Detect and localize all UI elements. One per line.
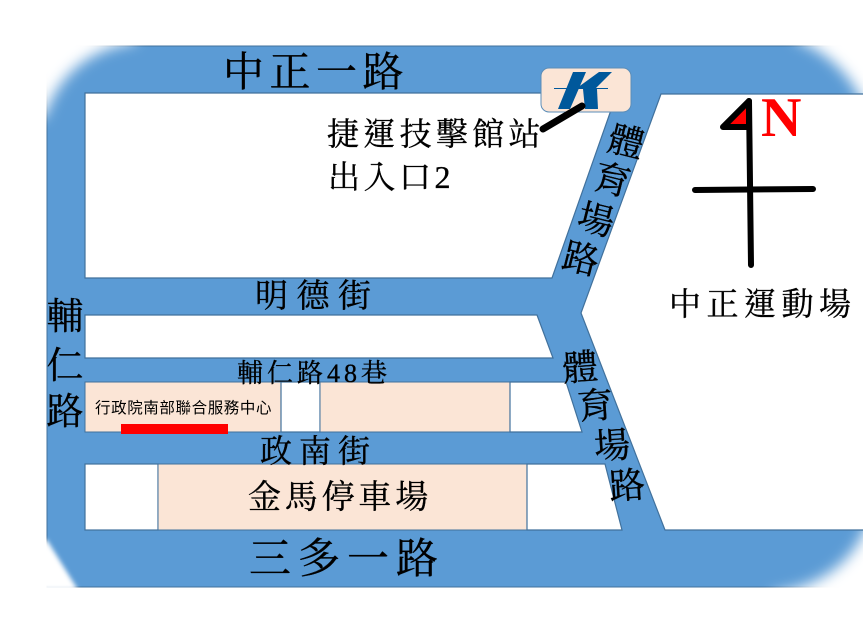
station label: 捷運技擊館站 xyxy=(327,116,545,152)
road label: 體育場路 north: 體 xyxy=(604,119,648,166)
block: north of Lane 48 xyxy=(85,315,553,358)
block: white lot west of parking xyxy=(85,464,158,530)
label: 中正運動場: 中正運動場 xyxy=(669,286,857,322)
road label: 輔仁路 vertical xyxy=(46,296,84,433)
road label: 體育場路 south: 育 xyxy=(576,385,615,427)
road label: 輔仁路48巷: 輔仁路48巷 xyxy=(237,359,391,388)
station pointer line xyxy=(543,106,582,129)
block: white lot east of parking xyxy=(527,464,622,530)
road label: 輔仁路 vertical: 仁 xyxy=(46,346,84,387)
label: 金馬停車場: 金馬停車場 xyxy=(248,479,432,516)
road label: 體育場路 south: 路 xyxy=(608,465,647,507)
road label: 輔仁路 vertical: 路 xyxy=(46,392,84,433)
block: peach building xyxy=(320,382,510,432)
road label: 輔仁路 vertical: 輔 xyxy=(46,296,84,338)
block: white lot east xyxy=(510,382,582,432)
station label: 出入口2 xyxy=(328,159,454,195)
MRT station logo xyxy=(541,68,631,112)
compass xyxy=(695,101,813,265)
north marker: N xyxy=(761,87,801,149)
road label: 體育場路 north: 路 xyxy=(559,236,603,283)
road label: 體育場路 south xyxy=(561,347,647,507)
road label: 體育場路 south: 體 xyxy=(561,347,600,389)
block: white lot between buildings xyxy=(281,382,320,432)
station label xyxy=(327,116,545,195)
road label: 體育場路 south: 場 xyxy=(593,425,632,467)
block: north of Mingde Street xyxy=(85,93,617,278)
road label: 體育場路 north: 育 xyxy=(590,157,634,204)
service center name: 行政院南部聯合服務中心 xyxy=(95,398,272,417)
road label: 中正一路: 中正一路 xyxy=(223,49,409,95)
road label: 三多一路: 三多一路 xyxy=(249,537,445,583)
block: service center building xyxy=(85,382,281,432)
block: Zhongzheng sports park xyxy=(581,94,863,530)
road label: 明德街: 明德街 xyxy=(255,278,380,315)
red location marker xyxy=(121,424,228,434)
road label: 政南街: 政南街 xyxy=(260,433,377,469)
road label: 體育場路 north xyxy=(559,119,648,283)
block: Jinma parking lot xyxy=(158,464,527,530)
road label: 體育場路 north: 場 xyxy=(574,197,618,244)
